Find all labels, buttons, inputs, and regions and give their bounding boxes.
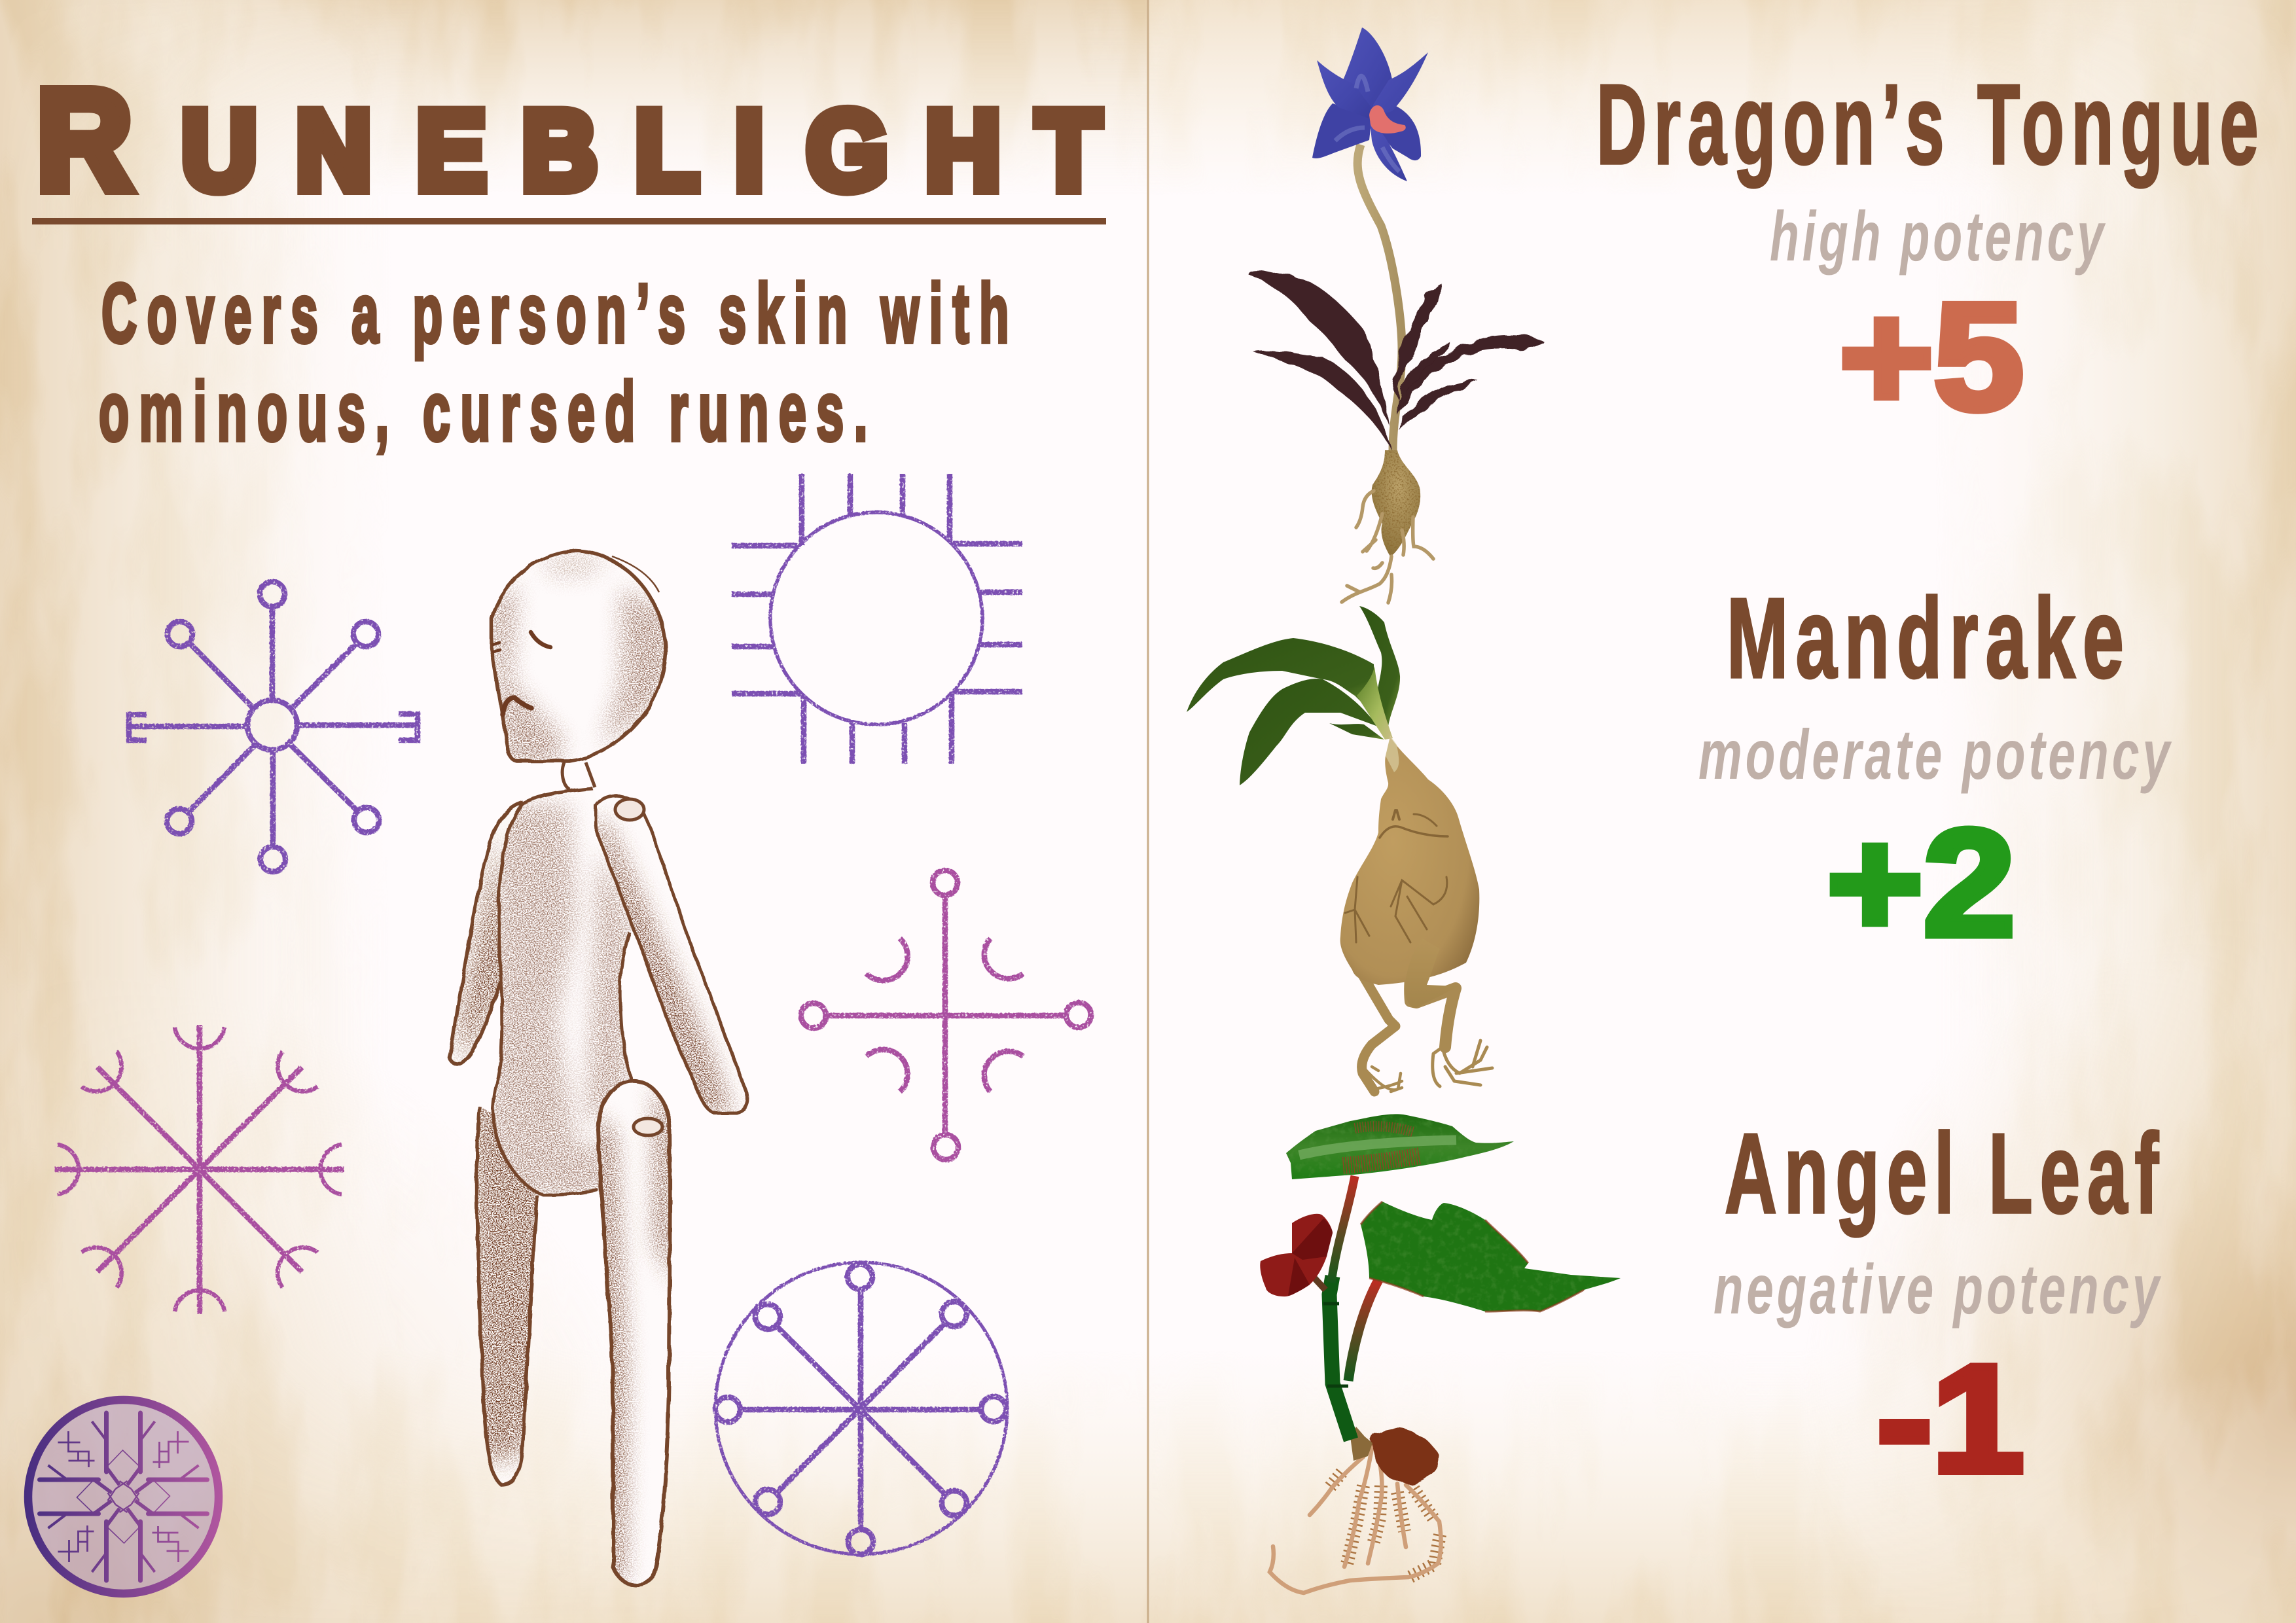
flower highlights <box>1335 76 1399 171</box>
tongue <box>1369 105 1406 134</box>
doll: torso <box>488 789 632 1198</box>
value: -1: -1 <box>1877 1334 2024 1504</box>
doll: right arm <box>589 795 747 1116</box>
description text: ominous, cursed runes. <box>99 365 878 459</box>
doll: face <box>493 632 550 715</box>
rune: eight-armed stave <box>55 1025 344 1314</box>
title rule <box>32 218 1106 224</box>
doll: left leg <box>474 1106 539 1487</box>
rune: cross with crescents <box>801 870 1091 1160</box>
doll: head <box>488 551 674 766</box>
description text: Covers a person’s skin with <box>101 267 1019 361</box>
neck highlight <box>1386 736 1399 772</box>
petiole to right leaf <box>1348 1280 1378 1381</box>
body <box>1340 737 1479 985</box>
plant: angel leaf <box>1260 1114 1621 1593</box>
rune: sun circle with rays <box>732 474 1022 764</box>
right leaf <box>1361 1202 1621 1311</box>
doll: neck <box>562 762 595 789</box>
plant: mandrake <box>1187 606 1492 1092</box>
roots <box>1342 491 1433 603</box>
red leaf <box>1260 1214 1333 1296</box>
rune: circle with spokes and brackets <box>129 582 418 872</box>
description text <box>99 267 1019 459</box>
main stem <box>1329 1276 1351 1440</box>
top leaf <box>1286 1114 1514 1179</box>
stem <box>1357 145 1402 452</box>
red side stem <box>1295 1257 1325 1290</box>
red petiole to top leaf <box>1331 1176 1355 1283</box>
rune emblem badge <box>20 1391 229 1603</box>
potency: high: high potency <box>1770 196 2107 276</box>
face and arm wrinkles <box>1345 810 1448 942</box>
corm <box>1371 1429 1439 1484</box>
page divider <box>1147 0 1149 1623</box>
doll: right leg <box>592 1081 677 1585</box>
corm neck <box>1350 1427 1372 1461</box>
sketched doll figure <box>449 551 747 1585</box>
title: UNEBLIGHT <box>181 88 1100 213</box>
dark leaves <box>1247 270 1544 452</box>
doll: left arm <box>449 802 523 1064</box>
tuber <box>1372 450 1420 556</box>
right leg thigh <box>1405 938 1459 1008</box>
leaves <box>1187 606 1400 785</box>
value: +2: +2 <box>1827 798 2015 968</box>
title: R <box>37 60 132 220</box>
plant: dragon's tongue <box>1247 27 1544 603</box>
value: +5: +5 <box>1839 272 2024 442</box>
flower <box>1312 27 1428 181</box>
roots <box>1270 1445 1441 1593</box>
stem joints <box>1323 1304 1348 1386</box>
legs and root feet <box>1359 955 1492 1092</box>
rune: wheel with eight nodes <box>715 1262 1007 1554</box>
